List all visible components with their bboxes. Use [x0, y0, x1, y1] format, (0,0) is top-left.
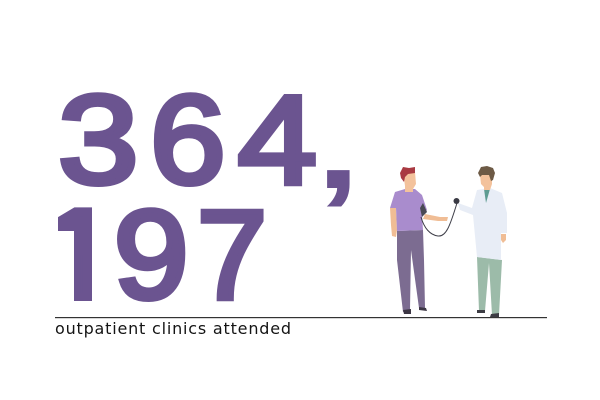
doctor head — [480, 175, 492, 190]
doctor legs — [477, 257, 502, 315]
big number: 364,: 6 — [150, 69, 226, 210]
doctor shirt — [484, 189, 490, 203]
caption: outpatient clinics attended — [55, 319, 291, 338]
big number: 197: 1 — [38, 184, 119, 325]
big number: 197 — [58, 207, 264, 302]
big number: 364,: 3 — [58, 69, 139, 210]
doctor hair — [478, 166, 495, 181]
patient right arm — [423, 214, 448, 221]
patient hair — [400, 167, 415, 182]
doctor coat — [458, 188, 507, 260]
patient legs — [397, 230, 425, 312]
patient head — [403, 172, 416, 192]
patient left arm — [390, 208, 397, 237]
illustration: tube — [421, 203, 457, 236]
patient shoes — [403, 307, 427, 314]
illustration: patient — [390, 167, 448, 314]
patient shirt — [390, 189, 427, 231]
blood pressure cuff — [420, 203, 427, 217]
big number: 364,: 4 — [238, 70, 317, 211]
big number: 364,: , — [316, 80, 360, 214]
doctor shoes — [477, 310, 499, 317]
doctor hand — [501, 234, 506, 243]
stethoscope gauge — [454, 198, 460, 204]
big number: 364, — [58, 69, 360, 214]
illustration: doctor — [454, 166, 507, 317]
big number: 197: 7 — [197, 184, 267, 326]
big number: 197: 9 — [114, 184, 189, 325]
baseline rule — [55, 317, 547, 318]
